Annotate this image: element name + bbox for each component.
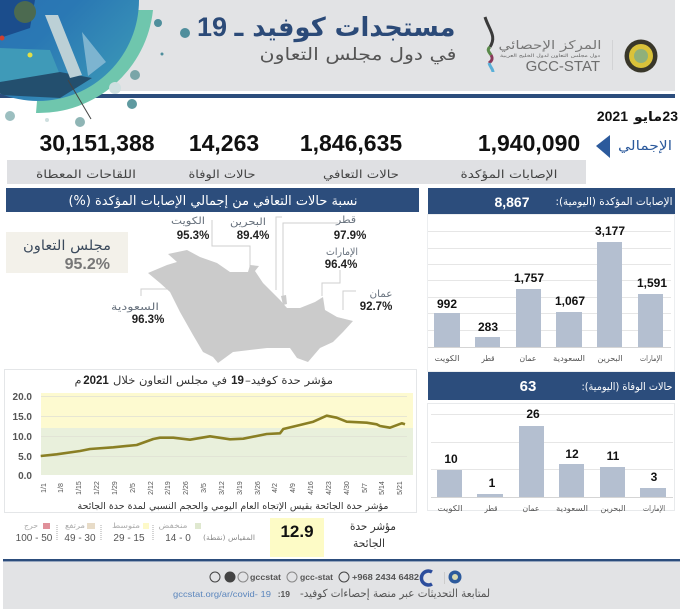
legend: critical (16, 521, 53, 544)
y axis labels: 15.0 (13, 412, 32, 423)
stat: deaths: حالات الوفاة (188, 167, 256, 182)
label: Saudi Arabia (111, 302, 164, 326)
legend: critical: حرج (24, 521, 38, 530)
severity trend line (41, 416, 405, 456)
x axis date labels: 5/21 (397, 481, 404, 495)
daily deaths bar chart: السعودية (556, 504, 588, 513)
GCC-STAT logo: دول مجلس التعاون لدول الخليج العربية (500, 54, 600, 59)
totals strip (7, 130, 586, 184)
stat: deaths: 14,263 (189, 130, 259, 156)
x axis date labels: 2/12 (148, 481, 155, 495)
footer link text: لمتابعة التحديثات عبر منصة إحصاءات كوفيد- (300, 587, 490, 600)
daily deaths bar chart: 26 (526, 407, 540, 421)
stat: vaccines: 30,151,388 (39, 130, 155, 156)
daily deaths bar chart: الكويت (438, 504, 462, 513)
indicator value: 12.9 (280, 522, 314, 541)
header banner (0, 0, 675, 127)
legend: high: مرتفع (65, 521, 85, 530)
label: Saudi Arabia: السعودية (111, 302, 159, 313)
x axis date labels: 3/12 (219, 481, 226, 495)
daily deaths bar chart: 3 (651, 470, 658, 484)
daily deaths bar chart: قطر (484, 504, 498, 513)
GCC recovery callout: 95.2% (65, 256, 110, 273)
stat: vaccines: اللقاحات المعطاة (36, 167, 136, 181)
contact handles: +968 2434 6482 (352, 572, 419, 582)
daily deaths bar chart: 12 (565, 447, 579, 461)
stat: confirmed: 1,940,090 (478, 130, 580, 156)
daily cases bar chart: 1,757 (514, 271, 544, 285)
daily deaths heading: 63 (520, 378, 536, 395)
indicator label (350, 519, 396, 550)
panel: severity index line chart (4, 370, 416, 512)
x axis date labels: 3/5 (201, 483, 208, 493)
x axis date labels: 4/30 (344, 481, 351, 495)
daily cases bar chart: 3,177 (595, 224, 625, 238)
header image circle (0, 0, 190, 127)
stat: deaths (188, 130, 259, 182)
icon: GCC emblem (624, 40, 658, 72)
daily cases bar chart: 283 (478, 320, 498, 334)
social icons (210, 572, 349, 582)
contact handles: gccstat (250, 572, 281, 582)
GCC-STAT logo (485, 17, 613, 75)
x axis date labels: 2/19 (165, 481, 172, 495)
daily deaths bar chart (428, 404, 674, 514)
recovery heading: نسبة حالات التعافي من إجمالي الإصابات المؤكدة (%) (68, 194, 358, 209)
x axis date labels: 1/22 (94, 481, 101, 495)
panel: recovery map (6, 188, 419, 363)
GCC-STAT logo: GCC-STAT (526, 58, 600, 75)
main title: 19 (197, 12, 227, 42)
x axis date labels: 1/29 (112, 481, 119, 495)
footer link text: gccstat.org/ar/covid- 19 (173, 589, 271, 599)
stat: recoveries: حالات التعافي (323, 167, 399, 181)
icon: center logo (421, 571, 445, 585)
GCC-STAT logo: المركز الإحصائي (498, 38, 602, 53)
daily cases heading: 8,867 (494, 194, 530, 210)
stat: vaccines (36, 130, 155, 181)
line chart caption: مؤشر حدة الجائحة بقيس الإتجاه العام اليومي والحجم النسبي لمدة حدة الجائحة (78, 501, 388, 512)
contact handles (250, 572, 419, 582)
date: مايو (633, 110, 662, 125)
x axis date labels: 4/23 (326, 481, 333, 495)
contact handles: gcc-stat (300, 572, 333, 582)
recovery heading (6, 188, 419, 212)
line chart title: مؤشر حدة كوفيد– (245, 374, 333, 387)
daily deaths bar chart: الإمارات (643, 504, 665, 514)
daily cases heading: الإصابات المؤكدة (اليومية): (556, 196, 672, 208)
icon: total arrow (596, 135, 610, 158)
legend: high: 49 - 30 (64, 533, 96, 544)
y axis labels (13, 392, 32, 482)
daily deaths heading (428, 372, 675, 400)
legend: critical: 100 - 50 (16, 533, 53, 544)
x axis date labels: 5/14 (379, 481, 386, 495)
indicator label: مؤشر حدة (350, 519, 396, 534)
label: UAE (325, 247, 358, 271)
panel: daily deaths (428, 372, 675, 514)
GCC map (148, 250, 353, 363)
legend: medium: متوسط (112, 521, 140, 530)
label: Saudi Arabia: 96.3% (132, 314, 164, 326)
severity bands (41, 393, 413, 475)
x axis date labels: 4/9 (290, 483, 297, 493)
subtitle: في دول مجلس التعاون (260, 45, 456, 65)
daily cases bar chart: الإمارات (640, 354, 662, 364)
x axis date labels: 1/1 (41, 483, 48, 493)
daily cases heading (428, 188, 675, 214)
daily deaths heading: حالات الوفاة (اليومية): (582, 381, 672, 393)
date (597, 108, 678, 125)
legend: medium: 29 - 15 (113, 533, 145, 544)
date: 23 (662, 108, 678, 124)
label: Kuwait: 95.3% (177, 230, 209, 242)
daily cases bar chart: 1,067 (555, 294, 585, 308)
map callout lines (141, 217, 356, 310)
indicator value (270, 518, 324, 557)
line chart title (75, 374, 333, 387)
x axis date labels (41, 481, 404, 495)
legend: low: 14 - 0 (165, 533, 191, 544)
daily cases bar chart: السعودية (553, 354, 585, 363)
label: Qatar: قطر (335, 215, 356, 226)
label: Oman: 92.7% (360, 301, 392, 313)
label: Qatar: 97.9% (334, 230, 366, 242)
x axis date labels: 4/16 (308, 481, 315, 495)
daily cases bar chart: عمان (520, 354, 536, 363)
x axis date labels: 4/2 (272, 483, 279, 493)
footer (3, 559, 680, 609)
stat: confirmed: الإصابات المؤكدة (460, 167, 558, 182)
x axis date labels: 2/5 (130, 483, 137, 493)
line chart title: م (75, 374, 81, 387)
legend: low: منخفض (158, 521, 188, 530)
y axis labels: 5.0 (18, 452, 32, 463)
footer link text (173, 587, 490, 600)
label: UAE: 96.4% (325, 259, 357, 271)
daily deaths bar chart: 10 (444, 452, 458, 466)
stat: recoveries (300, 130, 402, 181)
x axis date labels: 1/15 (76, 481, 83, 495)
daily cases bar chart (428, 214, 674, 372)
main title: مستجدات كوفيد ـ (234, 13, 456, 43)
total label: الإجمالي (618, 139, 672, 154)
label: Kuwait (171, 216, 209, 242)
label: UAE: الإمارات (326, 247, 358, 258)
daily deaths bar chart: البحرين (600, 504, 626, 513)
daily deaths bar chart: عمان (522, 504, 540, 513)
y axis labels: 0.0 (18, 471, 32, 482)
x axis date labels: 5/7 (362, 483, 369, 493)
severity indicator (16, 518, 396, 557)
label: Oman (360, 289, 392, 313)
daily cases bar chart: قطر (481, 354, 495, 363)
daily cases bar chart: البحرين (598, 354, 622, 363)
legend: high (64, 521, 96, 544)
label: Bahrain: 89.4% (237, 230, 269, 242)
legend: medium (112, 521, 149, 544)
indicator label: الجائحة (353, 536, 385, 550)
stat: confirmed (460, 130, 580, 182)
legend: low (158, 521, 201, 544)
line chart title: 19 (231, 375, 244, 387)
daily cases bar chart: 1,591 (637, 276, 667, 290)
GCC recovery callout: مجلس التعاون (23, 238, 111, 254)
GCC recovery callout (6, 232, 128, 273)
label: Bahrain: البحرين (230, 217, 266, 228)
label: Bahrain (230, 217, 269, 242)
daily deaths bar chart: 1 (489, 476, 496, 490)
line chart title: في مجلس التعاون خلال (113, 374, 227, 387)
daily cases bar chart: 992 (437, 297, 457, 311)
label: Qatar (334, 215, 366, 242)
icon: round emblem (448, 570, 462, 584)
label: Kuwait: الكويت (171, 216, 205, 227)
label: Oman: عمان (370, 289, 392, 300)
date: 2021 (597, 108, 628, 124)
daily deaths bar chart: 11 (607, 449, 620, 463)
stat: recoveries: 1,846,635 (300, 130, 402, 156)
x axis date labels: 3/26 (255, 481, 262, 495)
x axis date labels: 3/19 (237, 481, 244, 495)
line chart title: 2021 (83, 375, 109, 387)
panel: daily cases (428, 188, 675, 372)
daily cases bar chart: الكويت (434, 354, 460, 363)
scale label: المقياس (نقطة) (203, 534, 255, 542)
x axis date labels: 1/8 (58, 483, 65, 493)
x axis date labels: 2/26 (183, 481, 190, 495)
footer link text: :19 (278, 589, 290, 599)
y axis labels: 20.0 (13, 392, 32, 403)
y axis labels: 10.0 (13, 432, 32, 443)
